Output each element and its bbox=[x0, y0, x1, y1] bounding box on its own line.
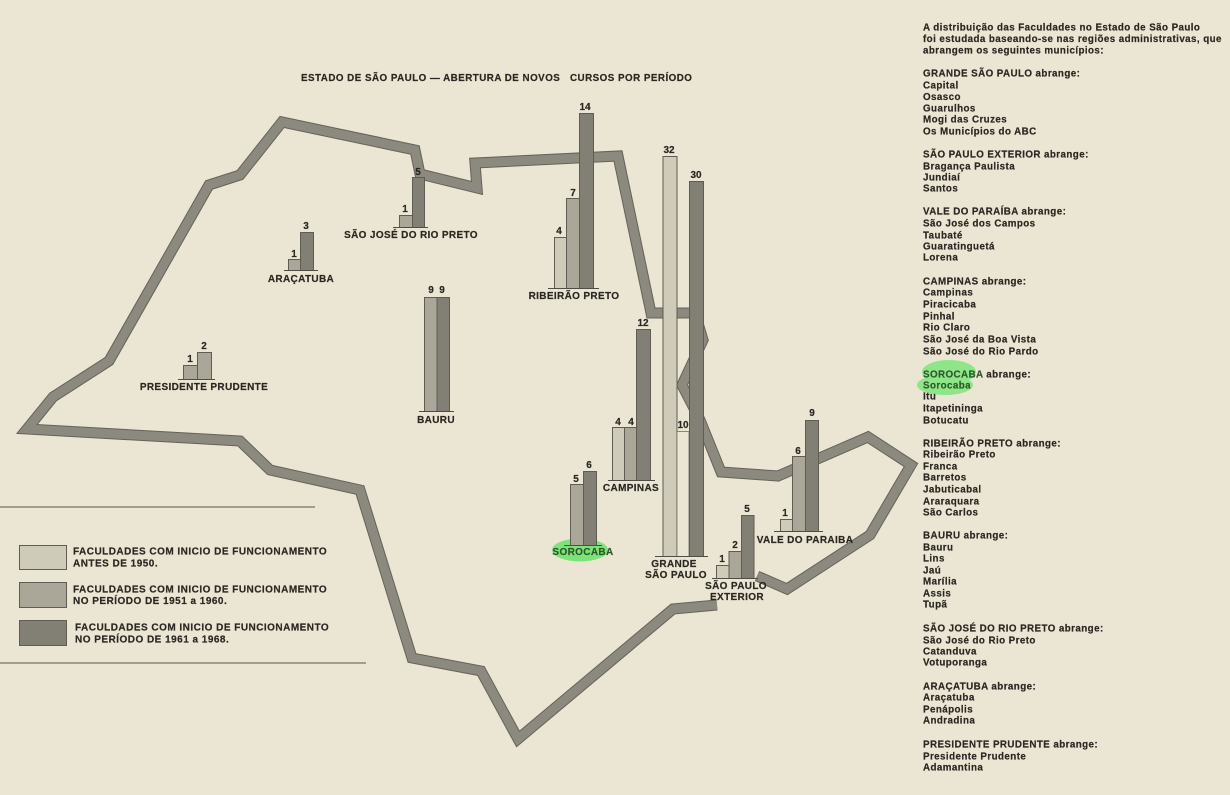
bar group: São Paulo Exterior: EXTERIOR bbox=[710, 592, 764, 603]
list: São José do Rio Preto: Catanduva bbox=[923, 646, 977, 657]
intro text bbox=[923, 22, 1222, 56]
legend item: 1961 a 1968: NO PERÍODO DE 1961 a 1968. bbox=[75, 632, 229, 646]
title: ESTADO DE SÃO PAULO — ABERTURA DE NOVOS bbox=[301, 73, 560, 84]
bar group: São Paulo Exterior: SÃO PAULO bbox=[705, 579, 767, 592]
bar group: Presidente Prudente bbox=[140, 341, 268, 393]
intro text: foi estudada baseando-se nas regiões administrativas, que bbox=[923, 34, 1222, 45]
list: Grande São Paulo: Osasco bbox=[923, 92, 961, 103]
bar group: Araçatuba: ARAÇATUBA bbox=[268, 274, 334, 285]
bar group: Vale do Paraíba bbox=[757, 408, 853, 546]
legend item: antes de 1950: ANTES DE 1950. bbox=[73, 558, 158, 570]
list: Ribeirão Preto: Jabuticabal bbox=[923, 484, 982, 495]
list: Presidente Prudente: PRESIDENTE PRUDENTE abrange: bbox=[923, 739, 1098, 750]
bar group: Grande São Paulo: 10 bbox=[677, 420, 689, 431]
bar group: Ribeirão Preto: 14 bbox=[579, 102, 591, 113]
list: Grande São Paulo: GRANDE SÃO PAULO abrange: bbox=[923, 68, 1080, 79]
bar group: Grande São Paulo: 32 bbox=[663, 145, 675, 156]
list: Araçatuba: Andradina bbox=[923, 715, 975, 726]
list: Grande São Paulo: Mogi das Cruzes bbox=[923, 114, 1007, 125]
list: Campinas: Campinas bbox=[923, 287, 973, 298]
list: Sorocaba: Itu bbox=[923, 391, 936, 402]
highlight: Sorocaba on map bbox=[552, 538, 608, 562]
list: São José do Rio Preto bbox=[923, 622, 1104, 668]
list: São José do Rio Preto: São José do Rio Preto bbox=[923, 635, 1036, 646]
bar group: São Paulo Exterior: 2 bbox=[732, 540, 738, 551]
bar group: São Paulo Exterior bbox=[705, 504, 767, 603]
list: Vale do Paraíba: Taubaté bbox=[923, 230, 963, 241]
list: Sorocaba: Itapetininga bbox=[923, 403, 983, 414]
list: Presidente Prudente: Adamantina bbox=[923, 762, 983, 773]
list: Ribeirão Preto: São Carlos bbox=[923, 507, 979, 518]
bar group: Bauru: 9 bbox=[439, 285, 445, 296]
bar group: Campinas: 4 bbox=[628, 417, 634, 428]
legend item: 1961 a 1968: FACULDADES COM INICIO DE FUNCIONAMENTO bbox=[75, 622, 329, 634]
list: São José do Rio Preto: SÃO JOSÉ DO RIO PRETO abrange: bbox=[923, 622, 1104, 634]
map outline: Estado de São Paulo bbox=[27, 122, 911, 739]
bar group: Bauru: BAURU bbox=[417, 415, 455, 426]
bar group: São Paulo Exterior: 5 bbox=[744, 504, 750, 515]
list: Bauru bbox=[923, 530, 1008, 610]
bar group: Campinas: CAMPINAS bbox=[603, 483, 659, 494]
bar group: Grande São Paulo: SÃO PAULO bbox=[645, 568, 707, 581]
list: Campinas: Rio Claro bbox=[923, 322, 970, 333]
legend item: 1951 a 1960: FACULDADES COM INICIO DE FUNCIONAMENTO bbox=[73, 584, 327, 596]
list: Grande São Paulo: Capital bbox=[923, 80, 959, 91]
list: São Paulo Exterior: SÃO PAULO EXTERIOR abrange: bbox=[923, 149, 1089, 160]
list: Ribeirão Preto: Barretos bbox=[923, 472, 967, 483]
list: Campinas: São José do Rio Pardo bbox=[923, 346, 1039, 357]
bar group: Sorocaba: 5 bbox=[573, 474, 579, 485]
list: Bauru: Lins bbox=[923, 553, 945, 564]
list: Sorocaba: SOROCABA abrange: bbox=[923, 369, 1031, 380]
bar group: Bauru bbox=[417, 285, 455, 426]
legend item: antes de 1950: FACULDADES COM INICIO DE FUNCIONAMENTO bbox=[73, 546, 327, 558]
bar group: Campinas bbox=[603, 318, 659, 494]
bar group: Ribeirão Preto: 7 bbox=[570, 188, 576, 199]
title: CURSOS POR PERÍODO bbox=[570, 72, 692, 84]
bar group: Campinas: 4 bbox=[615, 417, 621, 428]
list: Grande São Paulo bbox=[923, 68, 1080, 137]
bar group: São José do Rio Preto: 5 bbox=[415, 167, 421, 178]
bar group: Vale do Paraíba: 9 bbox=[809, 408, 815, 419]
bar group: Grande São Paulo bbox=[645, 145, 708, 581]
bar group: Sorocaba: SOROCABA bbox=[552, 547, 614, 558]
bar group: Vale do Paraíba: 6 bbox=[795, 446, 801, 457]
list: São Paulo Exterior bbox=[923, 149, 1089, 194]
list: Araçatuba bbox=[923, 681, 1036, 726]
list: Sorocaba bbox=[923, 369, 1031, 426]
bar group: Bauru: 9 bbox=[428, 285, 434, 296]
list: Araçatuba: Penápolis bbox=[923, 704, 973, 715]
list: Campinas: Pinhal bbox=[923, 311, 955, 322]
bar group: Vale do Paraíba: VALE DO PARAIBA bbox=[757, 535, 853, 546]
bar group: Ribeirão Preto bbox=[529, 102, 619, 302]
text column: municípios por região bbox=[923, 22, 1222, 773]
highlight: Sorocaba in list bbox=[917, 360, 976, 395]
list: Araçatuba: ARAÇATUBA abrange: bbox=[923, 681, 1036, 692]
list: Campinas: São José da Boa Vista bbox=[923, 334, 1036, 345]
list: Bauru: BAURU abrange: bbox=[923, 530, 1008, 541]
bar group: Ribeirão Preto: 4 bbox=[556, 226, 562, 237]
bar group: Sorocaba: 6 bbox=[586, 460, 592, 471]
list: Bauru: Marília bbox=[923, 576, 957, 587]
bar group: Presidente Prudente: 1 bbox=[187, 354, 193, 365]
list: Grande São Paulo: Guarulhos bbox=[923, 103, 976, 114]
list: Ribeirão Preto: Ribeirão Preto bbox=[923, 449, 996, 460]
list: Vale do Paraíba bbox=[923, 205, 1066, 263]
bar group: Vale do Paraíba: 1 bbox=[782, 508, 788, 519]
list: Sorocaba: Sorocaba bbox=[923, 380, 971, 391]
list: São José do Rio Preto: Votuporanga bbox=[923, 657, 987, 668]
bar group: Sorocaba bbox=[552, 460, 614, 558]
bar group: Grande São Paulo: 30 bbox=[690, 170, 702, 181]
legend item: 1951 a 1960 bbox=[20, 582, 327, 608]
bar group: São José do Rio Preto: 1 bbox=[402, 204, 408, 215]
list: Presidente Prudente: Presidente Prudente bbox=[923, 751, 1026, 762]
bar group: Campinas: 12 bbox=[637, 318, 649, 329]
list: Ribeirão Preto bbox=[923, 438, 1061, 518]
list: Bauru: Assis bbox=[923, 588, 951, 599]
intro text: abrangem os seguintes municípios: bbox=[923, 45, 1104, 56]
bar group: Grande São Paulo: GRANDE bbox=[651, 559, 697, 570]
list: Presidente Prudente bbox=[923, 739, 1098, 773]
list: Bauru: Tupã bbox=[923, 599, 947, 610]
bar group: São Paulo Exterior: 1 bbox=[719, 554, 725, 565]
list: Bauru: Bauru bbox=[923, 542, 953, 553]
legend item: antes de 1950 bbox=[20, 546, 327, 570]
bar group: São José do Rio Preto bbox=[344, 167, 478, 241]
bar group: São José do Rio Preto: SÃO JOSÉ DO RIO PRETO bbox=[344, 228, 478, 241]
list: Vale do Paraíba: VALE DO PARAÍBA abrange: bbox=[923, 205, 1066, 217]
list: Bauru: Jaú bbox=[923, 565, 941, 576]
list: Campinas: Piracicaba bbox=[923, 299, 976, 310]
bar group: Araçatuba: 1 bbox=[291, 249, 297, 260]
bar group: Araçatuba: 3 bbox=[303, 221, 309, 232]
list: Sorocaba: Botucatu bbox=[923, 415, 969, 426]
legend bbox=[0, 507, 366, 663]
list: Grande São Paulo: Os Municípios do ABC bbox=[923, 126, 1037, 137]
list: Araçatuba: Araçatuba bbox=[923, 692, 975, 703]
list: Vale do Paraíba: Lorena bbox=[923, 252, 958, 263]
intro text: A distribuição das Faculdades no Estado de São Paulo bbox=[923, 22, 1200, 33]
legend item: 1961 a 1968 bbox=[20, 620, 329, 646]
list: São Paulo Exterior: Santos bbox=[923, 183, 958, 194]
bar group: Presidente Prudente: PRESIDENTE PRUDENTE bbox=[140, 382, 268, 393]
legend item: 1951 a 1960: NO PERÍODO DE 1951 a 1960. bbox=[73, 594, 227, 607]
list: Campinas bbox=[923, 276, 1039, 357]
bar group: Presidente Prudente: 2 bbox=[201, 341, 207, 352]
list: Ribeirão Preto: Franca bbox=[923, 461, 958, 472]
bar group: Araçatuba bbox=[268, 221, 334, 285]
list: São Paulo Exterior: Jundiaí bbox=[923, 172, 960, 183]
list: São Paulo Exterior: Bragança Paulista bbox=[923, 161, 1015, 172]
list: Ribeirão Preto: RIBEIRÃO PRETO abrange: bbox=[923, 438, 1061, 449]
list: Campinas: CAMPINAS abrange: bbox=[923, 276, 1026, 287]
bar group: Ribeirão Preto: RIBEIRÃO PRETO bbox=[529, 289, 619, 302]
list: Vale do Paraíba: São José dos Campos bbox=[923, 218, 1036, 229]
list: Vale do Paraíba: Guaratinguetá bbox=[923, 241, 995, 252]
list: Ribeirão Preto: Araraquara bbox=[923, 496, 980, 507]
